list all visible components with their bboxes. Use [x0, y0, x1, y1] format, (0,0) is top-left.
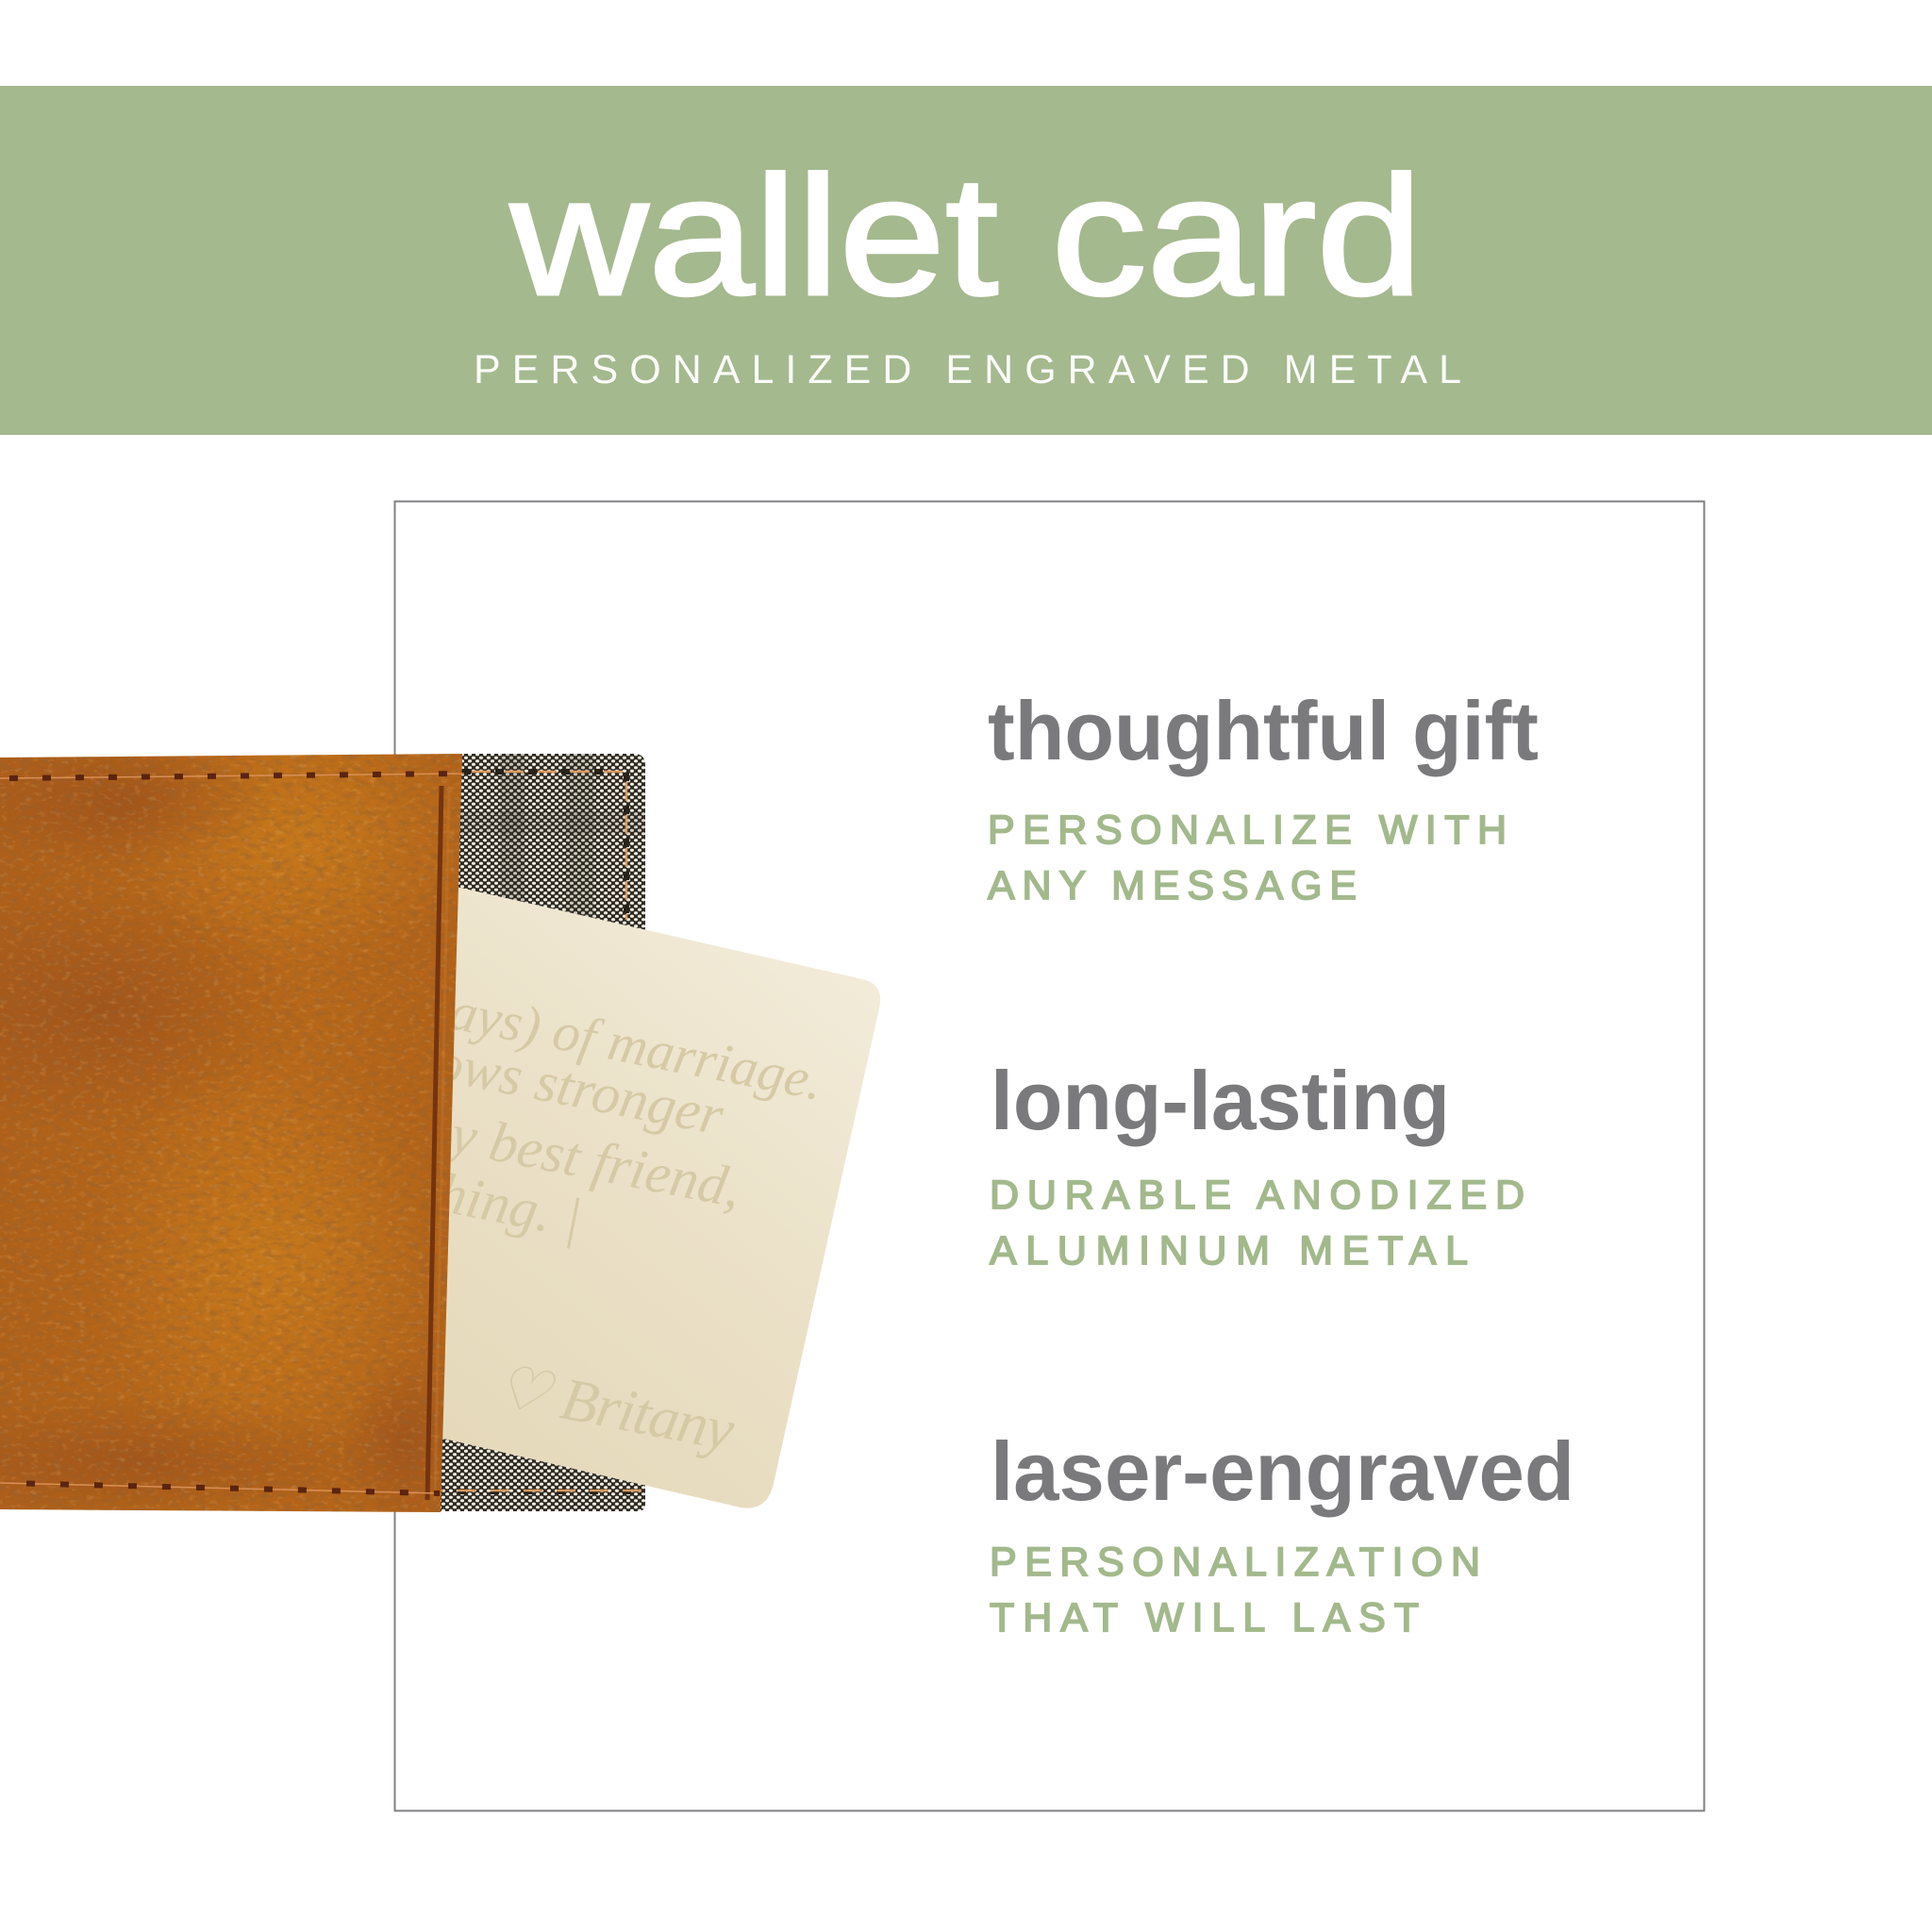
description: PERSONALIZATION	[990, 1540, 1480, 1585]
top stitching	[0, 774, 464, 778]
description: ANY MESSAGE	[988, 863, 1357, 908]
description: PERSONALIZE WITH	[988, 808, 1507, 853]
feature: long-lasting	[990, 1054, 1524, 1274]
metal wallet card	[383, 877, 880, 1508]
leather wallet front	[0, 717, 481, 1528]
description	[990, 1540, 1480, 1641]
description	[990, 1173, 1524, 1274]
heading: thoughtful gift	[988, 684, 1539, 777]
engraved message	[383, 974, 828, 1250]
feature: thoughtful gift	[988, 684, 1539, 908]
description: ALUMINUM METAL	[990, 1228, 1468, 1274]
wallet photo illustration	[0, 717, 880, 1528]
engraved signature: ♡ Britany	[490, 1352, 741, 1464]
title: wallet card	[509, 142, 1423, 331]
bottom stitching	[0, 1483, 440, 1493]
engraved message: grows stronger	[383, 1021, 729, 1147]
engraved message: my best friend,	[406, 1094, 746, 1220]
subtitle: PERSONALIZED ENGRAVED METAL	[474, 347, 1461, 392]
feature: laser-engraved	[990, 1424, 1574, 1641]
description	[988, 808, 1507, 908]
panel: features frame	[394, 502, 1704, 1811]
description: DURABLE ANODIZED	[990, 1173, 1524, 1218]
engraved message: thing. |	[418, 1158, 587, 1250]
header band	[0, 86, 1932, 435]
wallet fabric lining	[425, 754, 645, 1511]
heading: long-lasting	[991, 1054, 1450, 1147]
engraved message: days) of marriage.	[418, 974, 828, 1112]
heading: laser-engraved	[991, 1424, 1574, 1518]
description: THAT WILL LAST	[990, 1595, 1419, 1641]
